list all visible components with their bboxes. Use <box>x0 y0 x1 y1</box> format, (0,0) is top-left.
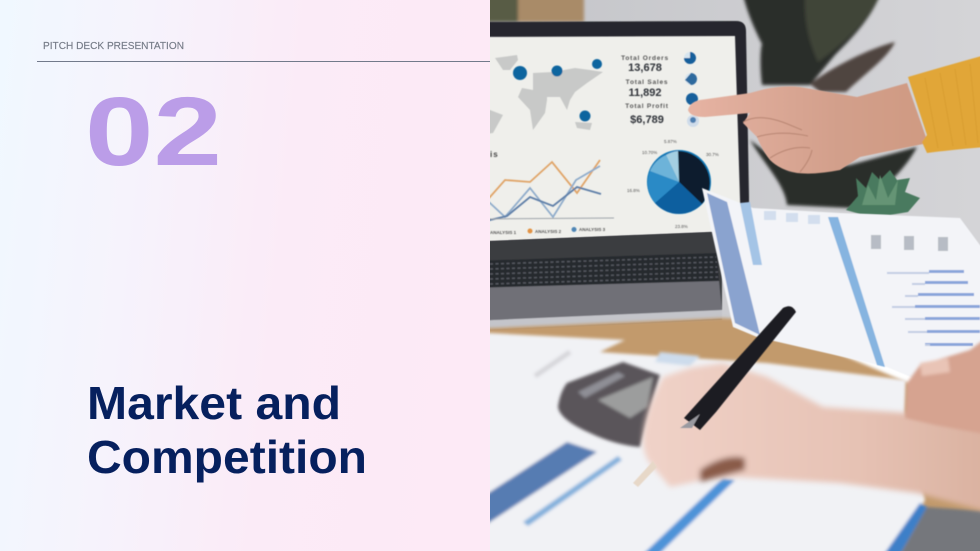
desk <box>470 318 980 551</box>
section number: 02 <box>85 77 222 186</box>
succulent <box>846 170 920 215</box>
writing hand <box>643 363 980 515</box>
laptop deck <box>490 231 723 326</box>
stat: total orders: Total Sales <box>626 79 668 86</box>
keyboard rows <box>490 257 718 284</box>
stat: total orders: 13,678 <box>628 62 662 74</box>
title: Competition <box>87 431 367 483</box>
blue cover strip <box>707 193 760 335</box>
right holding hand <box>905 335 980 435</box>
chart legend: ANALYSIS 1 <box>490 230 517 235</box>
shelf at top left <box>490 0 586 22</box>
chart heading fragment: is <box>490 150 499 159</box>
document with bar chart held up <box>702 188 980 380</box>
panel: left gradient background <box>0 0 490 551</box>
laptop bezel <box>490 20 750 242</box>
header rule <box>37 61 490 62</box>
blue clipboard edge <box>880 503 927 551</box>
chart legend <box>490 227 606 235</box>
world map <box>490 54 602 134</box>
stat: total orders: $6,789 <box>630 114 664 126</box>
horizontal bars <box>915 270 980 346</box>
blue form header <box>490 440 598 524</box>
pie labels: 23.8% <box>675 224 688 229</box>
line chart <box>480 160 614 222</box>
dashboard on screen <box>470 52 719 235</box>
eyebrow label: PITCH DECK PRESENTATION <box>43 40 184 52</box>
faint paper text <box>535 352 570 376</box>
pie labels: 5.87% <box>664 139 677 144</box>
map pins <box>513 59 602 122</box>
chart legend: ANALYSIS 3 <box>579 227 606 232</box>
title: Market and <box>87 377 341 429</box>
yellow sleeve <box>908 55 980 153</box>
calculator <box>558 362 660 447</box>
small progress dials <box>684 52 696 64</box>
pie labels: 30.7% <box>706 152 719 157</box>
stat: total orders: Total Orders <box>621 55 669 62</box>
pie chart <box>647 150 711 214</box>
title <box>87 377 367 483</box>
pie labels: 16.8% <box>627 188 640 193</box>
plant <box>743 0 917 208</box>
papers on desk, blurred <box>470 332 980 551</box>
pen <box>633 306 796 487</box>
stat: total orders <box>621 55 669 126</box>
wall background <box>490 0 980 340</box>
stat: total orders: 11,892 <box>628 87 662 99</box>
pie labels: 10.70% <box>642 150 657 155</box>
stat: total orders: Total Profit <box>625 103 669 110</box>
laptop screen <box>470 36 741 242</box>
pointing hand with yellow sleeve <box>688 55 980 174</box>
pie labels <box>627 139 719 229</box>
chart legend: ANALYSIS 2 <box>535 229 562 234</box>
panel: office photo <box>470 0 980 551</box>
